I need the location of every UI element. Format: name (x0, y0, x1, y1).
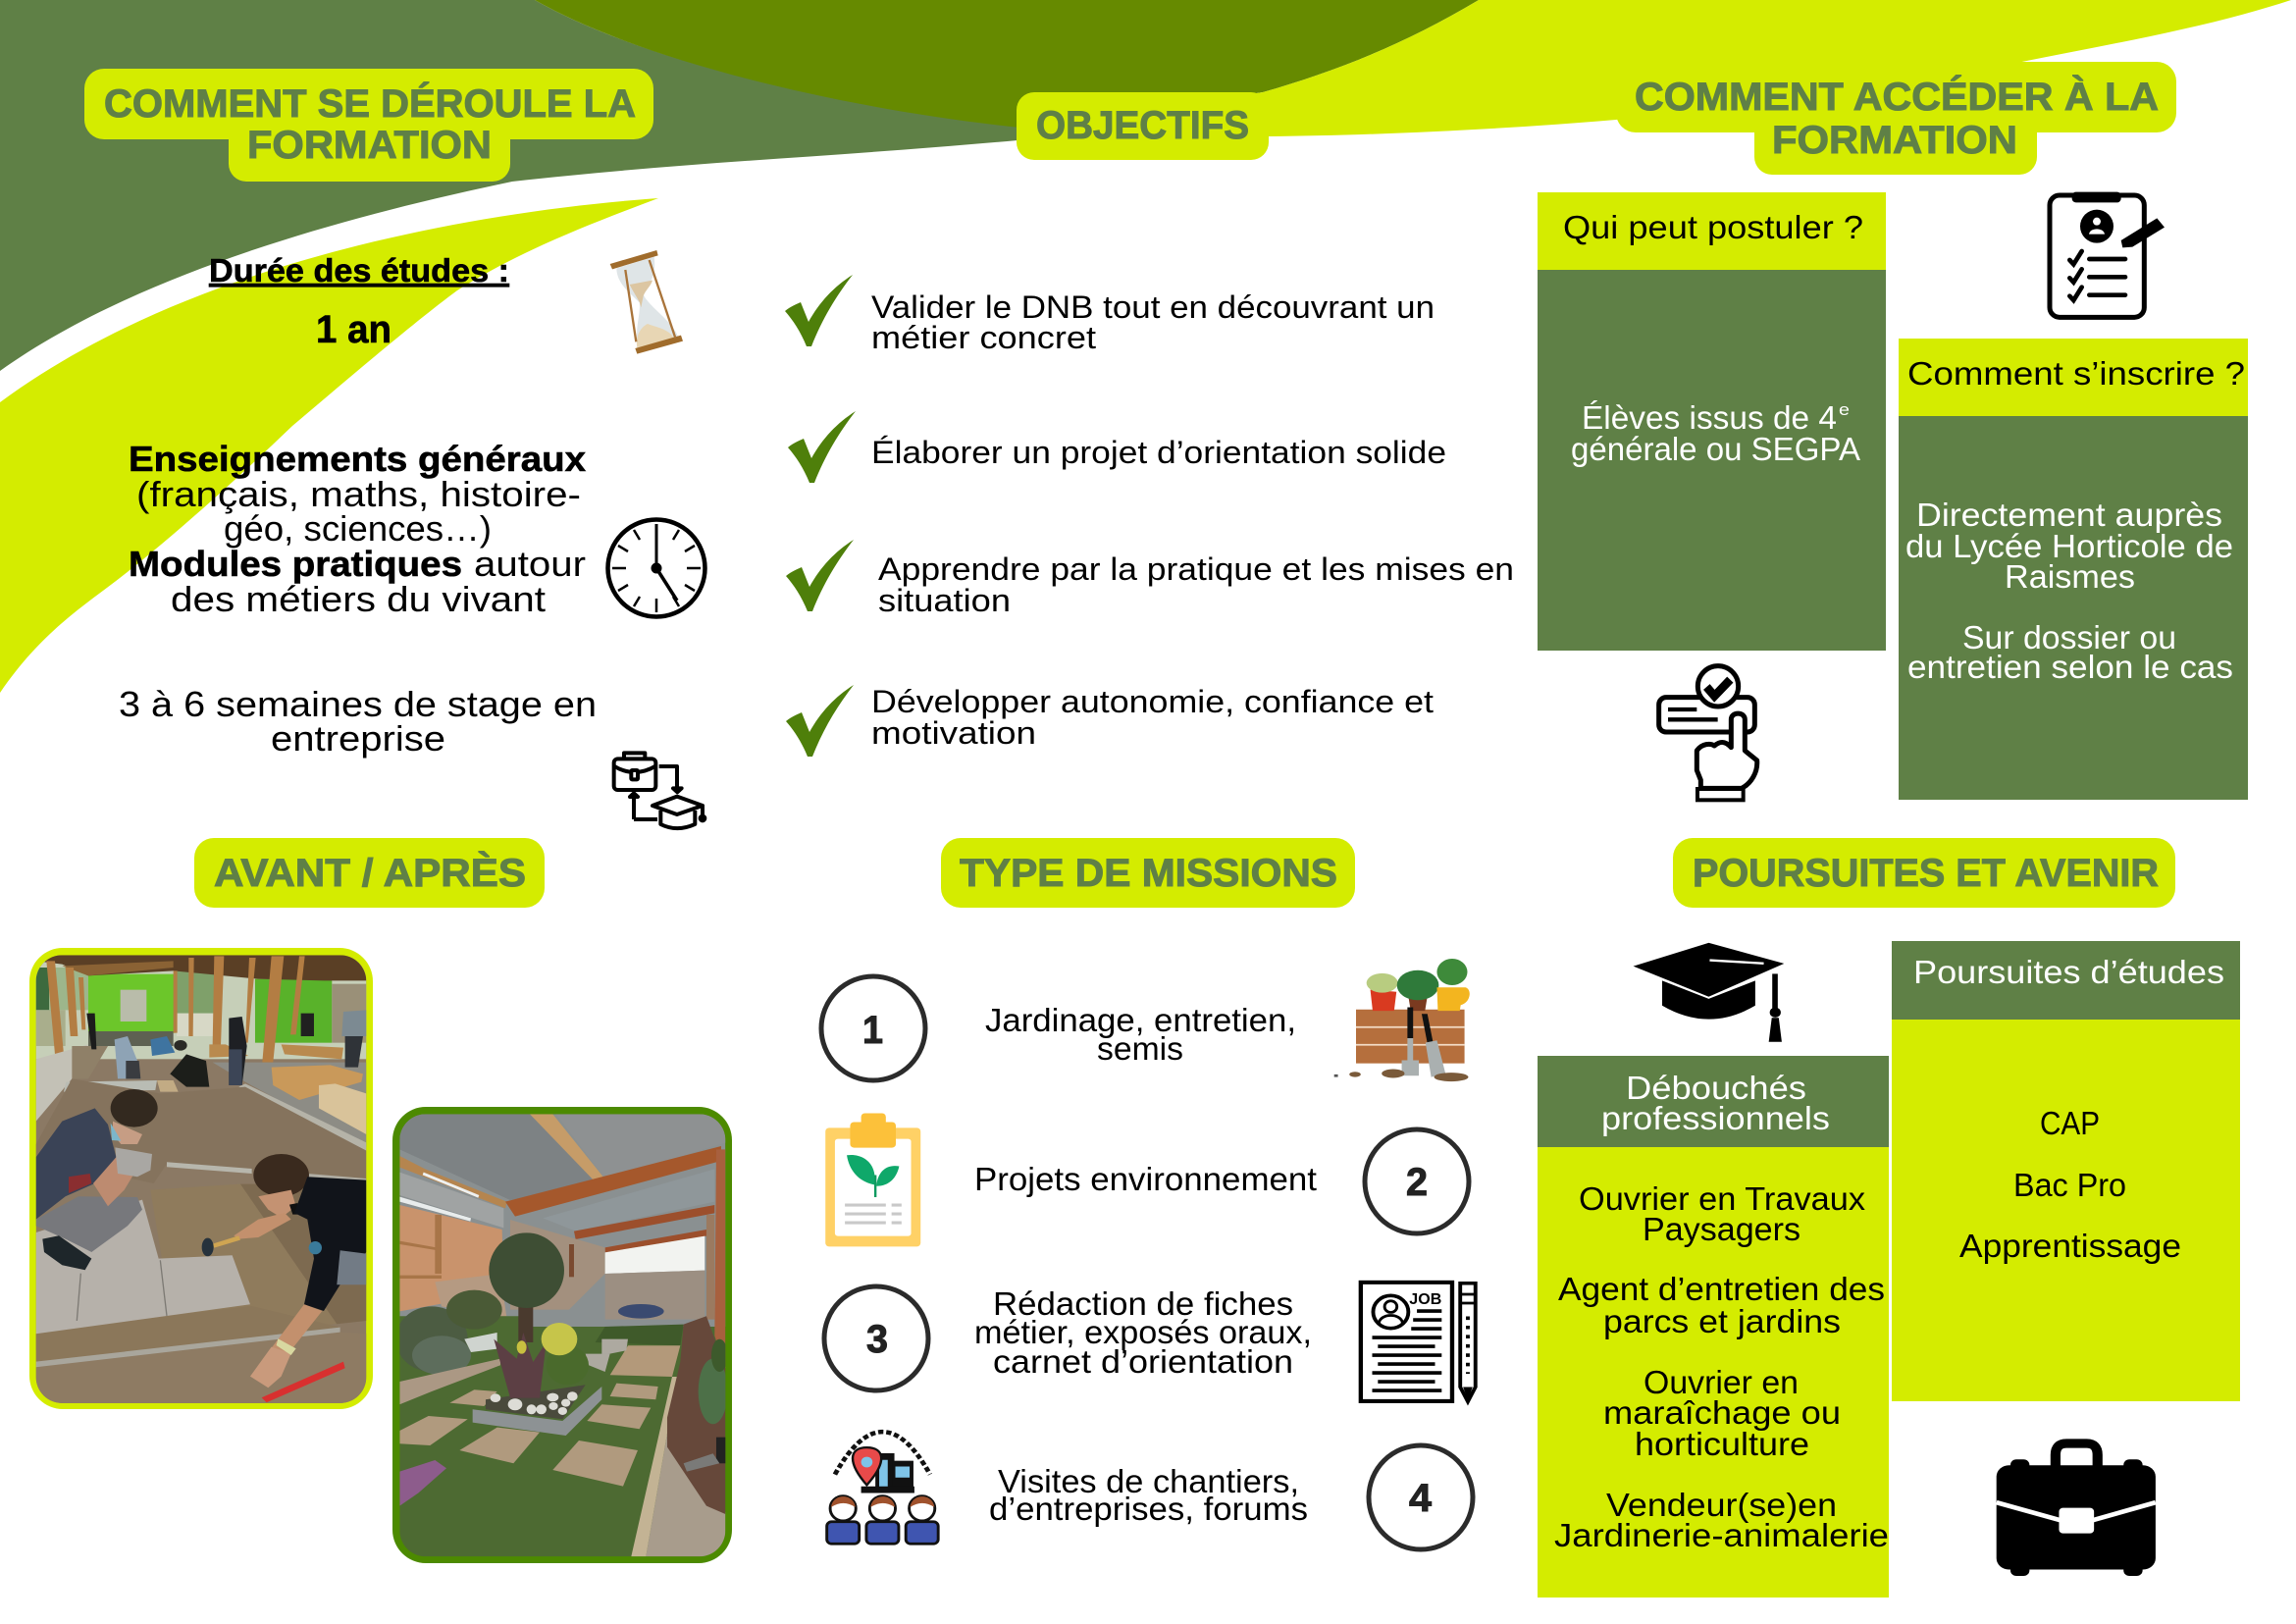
icon: job sheet and pencil: JOB (1409, 1291, 1441, 1308)
objective 3 (786, 540, 1514, 618)
icon: hourglass (610, 250, 683, 354)
text: durée des études (209, 252, 509, 351)
icon: application clipboard (2050, 192, 2165, 317)
text: enseignements: autour (474, 544, 586, 584)
text: durée des études: Durée des études : (209, 252, 509, 288)
text: enseignements: géo, sciences…) (224, 508, 492, 549)
icon: site visit group (827, 1432, 938, 1544)
text: stage: entreprise (271, 718, 445, 759)
panel: débouchés professionnels: Débouchés (1626, 1070, 1806, 1106)
background: dark green swoosh (535, 0, 1479, 128)
icon: graduation cap (1631, 942, 1786, 1042)
objective 3: situation (878, 583, 1011, 618)
heading: avant / après: AVANT / APRÈS (214, 851, 526, 895)
heading: type de missions (941, 838, 1355, 908)
heading: type de missions: TYPE DE MISSIONS (960, 852, 1337, 895)
heading: objectifs (1017, 92, 1269, 160)
panel: comment s'inscrire: Raismes (2005, 558, 2135, 595)
mission 1: semis (1097, 1030, 1183, 1067)
panel: poursuites d'études (1892, 941, 2240, 1401)
heading: avant / après (194, 838, 545, 908)
heading: comment se déroule la formation: COMMENT SE DÉROULE LA (104, 81, 636, 126)
mission 1: 1 (862, 1009, 883, 1052)
panel: débouchés professionnels: Paysagers (1643, 1211, 1800, 1247)
panel: comment s'inscrire (1899, 339, 2248, 800)
panel: débouchés professionnels: Vendeur(se)en (1606, 1487, 1837, 1523)
photo: avant, chantier (29, 948, 373, 1409)
mission 3: métier, exposés oraux, (974, 1314, 1312, 1350)
panel: qui peut postuler: Qui peut postuler ? (1563, 209, 1863, 245)
mission 3: carnet d’orientation (993, 1343, 1293, 1380)
mission 3 (824, 1285, 1312, 1390)
heading: comment accéder à la formation: COMMENT ACCÉDER À LA (1635, 75, 2159, 119)
panel: comment s'inscrire: du Lycée Horticole de (1905, 528, 2233, 564)
panel: débouchés professionnels: maraîchage ou (1603, 1394, 1841, 1431)
mission 2: 2 (1406, 1161, 1428, 1204)
icon: hand and check (1659, 666, 1757, 800)
panel: qui peut postuler: générale ou SEGPA (1571, 431, 1860, 467)
text: enseignements: Modules pratiques (129, 544, 462, 584)
objective 4 (786, 684, 1434, 757)
background: lime left swoosh (0, 198, 658, 693)
heading: poursuites et avenir: POURSUITES ET AVENIR (1693, 852, 2159, 895)
mission 3: 3 (866, 1318, 888, 1361)
objective 3: Apprendre par la pratique et les mises en (878, 551, 1514, 587)
heading: objectifs: OBJECTIFS (1036, 104, 1249, 147)
mission 2 (974, 1129, 1469, 1233)
heading: comment se déroule la formation (84, 69, 653, 182)
panel: débouchés professionnels: horticulture (1635, 1426, 1809, 1462)
mission 4: 4 (1409, 1477, 1433, 1520)
panel: qui peut postuler: e (1839, 400, 1850, 419)
icon: job sheet and pencil (1361, 1283, 1476, 1401)
panel: poursuites d'études: Bac Pro (2013, 1167, 2126, 1203)
panel: débouchés professionnels: parcs et jardins (1603, 1303, 1841, 1339)
icon: plant clipboard (825, 1113, 920, 1246)
mission 1: Jardinage, entretien, (985, 1002, 1296, 1038)
panel: poursuites d'études: Apprentissage (1959, 1228, 2181, 1264)
background: olive swoosh (0, 0, 1018, 371)
mission 4 (989, 1445, 1473, 1549)
mission 3: Rédaction de fiches (993, 1285, 1293, 1322)
objective 4: motivation (871, 715, 1036, 751)
icon: briefcase to graduation (614, 753, 704, 828)
text: enseignements: (français, maths, histoire- (136, 474, 581, 514)
text: enseignements: des métiers du vivant (171, 579, 546, 619)
icon: briefcase (1997, 1443, 2156, 1576)
text: enseignements: Enseignements généraux (129, 439, 586, 479)
icon: garden crate (1334, 959, 1470, 1081)
panel: comment s'inscrire: entretien selon le cas (1907, 649, 2233, 685)
objective 2 (788, 411, 1446, 483)
mission 2: Projets environnement (974, 1161, 1317, 1197)
panel: débouchés professionnels: Ouvrier en Travaux (1579, 1180, 1866, 1217)
panel: qui peut postuler (1538, 192, 1886, 651)
panel: débouchés professionnels: Jardinerie-animalerie (1554, 1517, 1889, 1553)
panel: comment s'inscrire: Comment s’inscrire ? (1907, 355, 2245, 392)
mission 1 (821, 976, 1296, 1080)
panel: débouchés professionnels: Agent d’entretien des (1558, 1271, 1885, 1307)
panel: débouchés professionnels: Ouvrier en (1644, 1364, 1799, 1400)
panel: comment s'inscrire: Sur dossier ou (1962, 619, 2176, 655)
objective 1: métier concret (871, 320, 1096, 355)
panel: débouchés professionnels (1538, 1056, 1889, 1598)
heading: poursuites et avenir (1673, 838, 2175, 908)
text: stage (119, 684, 597, 759)
panel: débouchés professionnels: professionnels (1601, 1100, 1830, 1136)
icon: clock (608, 520, 704, 616)
text: durée des études: 1 an (316, 308, 391, 351)
mission 4: Visites de chantiers, (998, 1463, 1299, 1499)
panel: poursuites d'études: Poursuites d’études (1913, 954, 2224, 990)
panel: poursuites d'études: CAP (2040, 1105, 2100, 1141)
panel: qui peut postuler: Élèves issus de 4 (1582, 399, 1837, 436)
background: lime top band (1020, 0, 2291, 136)
heading: comment accéder à la formation: FORMATION (1772, 119, 2017, 162)
text: stage: 3 à 6 semaines de stage en (119, 684, 597, 724)
objective 1 (785, 275, 1435, 355)
objective 2: Élaborer un projet d’orientation solide (871, 435, 1446, 470)
heading: comment se déroule la formation: FORMATION (247, 124, 492, 167)
text: enseignements (129, 439, 586, 619)
mission 4: d’entreprises, forums (989, 1491, 1308, 1527)
objective 1: Valider le DNB tout en découvrant un (871, 289, 1435, 325)
panel: comment s'inscrire: Directement auprès (1916, 497, 2222, 533)
photo: après, jardin (392, 1107, 732, 1563)
heading: comment accéder à la formation (1616, 62, 2176, 175)
objective 4: Développer autonomie, confiance et (871, 684, 1434, 719)
